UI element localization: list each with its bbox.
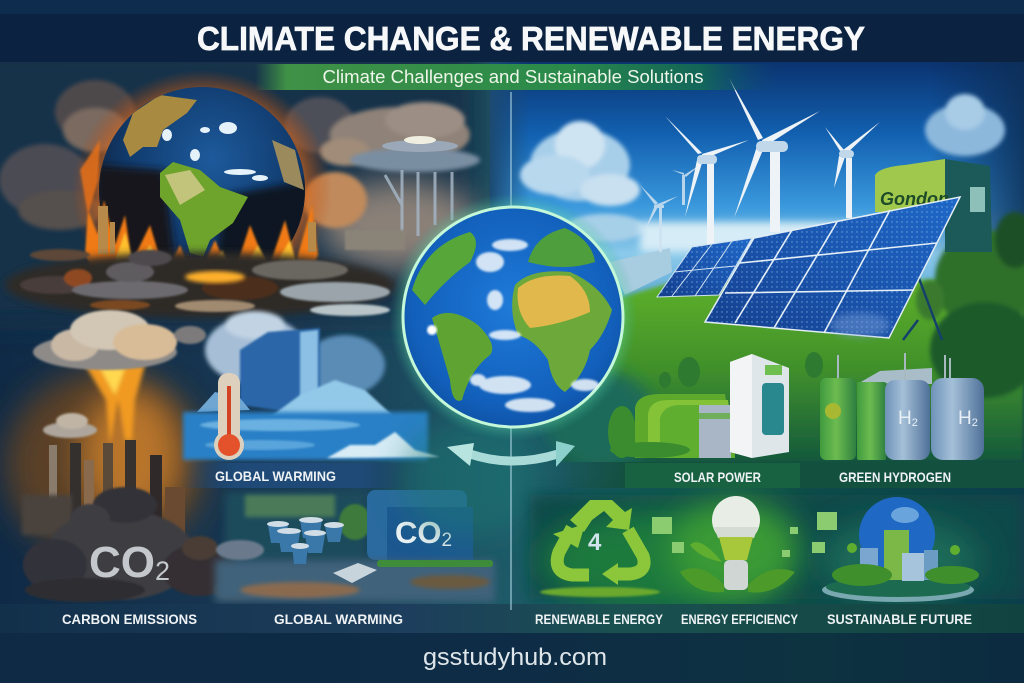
blue sky xyxy=(490,62,1024,302)
icon: green hydrogen tanks: 2 xyxy=(972,417,978,429)
icon: small solar array xyxy=(657,238,752,297)
carbon smoke heap xyxy=(23,487,263,602)
tree cluster right xyxy=(916,212,1024,398)
icon: envelopes xyxy=(652,512,837,557)
green meadow xyxy=(560,280,1024,462)
icon: green hydrogen tanks: H xyxy=(958,408,972,429)
europe xyxy=(528,228,595,267)
label: solar power: SOLAR POWER xyxy=(674,469,761,485)
dark smoke clouds xyxy=(0,80,470,230)
icon: green hydrogen tanks: 2 xyxy=(912,417,918,429)
white clouds xyxy=(162,122,268,181)
flooded town xyxy=(215,490,495,602)
text: CO2 on building: 2 xyxy=(442,530,452,551)
africa xyxy=(512,271,612,392)
warm haze right of burning earth xyxy=(320,180,480,270)
glacier cloud xyxy=(205,311,385,395)
icon: factory chimneys xyxy=(22,440,185,557)
icon: large solar panel xyxy=(705,197,960,340)
top left dark wash xyxy=(0,40,480,320)
label band: upper left xyxy=(180,463,405,488)
pale fence xyxy=(610,248,672,295)
white clouds xyxy=(520,94,1005,242)
label: sustainable future: SUSTAINABLE FUTURE xyxy=(827,611,972,627)
burning pillars xyxy=(98,206,316,254)
grass under recycle xyxy=(540,587,660,597)
panel: sustainable solutions xyxy=(490,62,1024,470)
label: renewable energy: RENEWABLE ENERGY xyxy=(535,611,664,627)
shrubs on meadow xyxy=(659,352,823,388)
text: CO2 on smoke: 2 xyxy=(155,556,170,586)
green hedge xyxy=(608,394,735,458)
label band: upper right xyxy=(560,462,1024,488)
icon: charger station xyxy=(730,354,789,458)
icon: central earth xyxy=(389,193,637,441)
clouds xyxy=(470,239,599,412)
label: global warming bottom: GLOBAL WARMING xyxy=(274,611,403,627)
panel: lower right green zone xyxy=(530,495,1024,610)
top strip xyxy=(0,0,1024,14)
burnt zones xyxy=(99,161,178,255)
title: CLIMATE CHANGE & RENEWABLE ENERGY xyxy=(197,20,865,57)
icon: wind turbines xyxy=(640,78,880,252)
title band xyxy=(0,14,1024,62)
flood water xyxy=(183,412,440,460)
africa fragment xyxy=(272,140,304,190)
text: number in recycle icon: 4 xyxy=(588,529,602,556)
fire glow around burning earth xyxy=(72,70,332,310)
flames xyxy=(80,140,318,292)
label: carbon emissions: CARBON EMISSIONS xyxy=(62,611,197,627)
teal blend below the globe xyxy=(545,370,655,470)
icon: melting glacier xyxy=(197,328,392,417)
icon: burning earth xyxy=(99,87,305,260)
website footer: gsstudyhub.com xyxy=(423,644,607,671)
label: global warming top: GLOBAL WARMING xyxy=(215,468,336,484)
factory cloud xyxy=(33,310,206,438)
dead forest structure xyxy=(345,136,480,250)
icon: recycle arrows xyxy=(553,500,644,585)
icon: storage unit xyxy=(699,405,731,458)
south america xyxy=(432,313,492,401)
white horizon trees xyxy=(640,222,880,252)
subtitle: Climate Challenges and Sustainable Solutions xyxy=(322,66,704,87)
text: CO2 on building: CO xyxy=(395,515,442,550)
center divider line xyxy=(510,92,512,610)
north america xyxy=(123,95,197,157)
icon: green hydrogen tanks xyxy=(820,353,984,460)
brick wall with orange haze xyxy=(5,370,205,560)
footer band xyxy=(0,633,1024,683)
north america xyxy=(412,232,476,305)
subtitle band xyxy=(255,64,780,90)
icon: thermometer xyxy=(214,373,244,460)
flame plume xyxy=(85,365,145,445)
label strip xyxy=(0,604,1024,633)
label: energy efficiency: ENERGY EFFICIENCY xyxy=(681,611,799,627)
text: CO2 on smoke: CO xyxy=(89,538,155,587)
icon: factory building: Gondon xyxy=(880,189,949,209)
icon: energy saving bulb xyxy=(680,496,795,593)
icon: green hydrogen tanks: H xyxy=(898,408,912,429)
icon: factory building xyxy=(875,159,992,252)
panel: climate challenges xyxy=(0,40,495,602)
icon: sustainable future globe xyxy=(822,497,979,602)
teal glow behind central earth xyxy=(400,420,540,540)
label: green hydrogen: GREEN HYDROGEN xyxy=(839,469,951,485)
south america xyxy=(160,162,248,257)
double-headed arrow xyxy=(447,441,575,467)
scorched rocky ground xyxy=(5,249,395,318)
